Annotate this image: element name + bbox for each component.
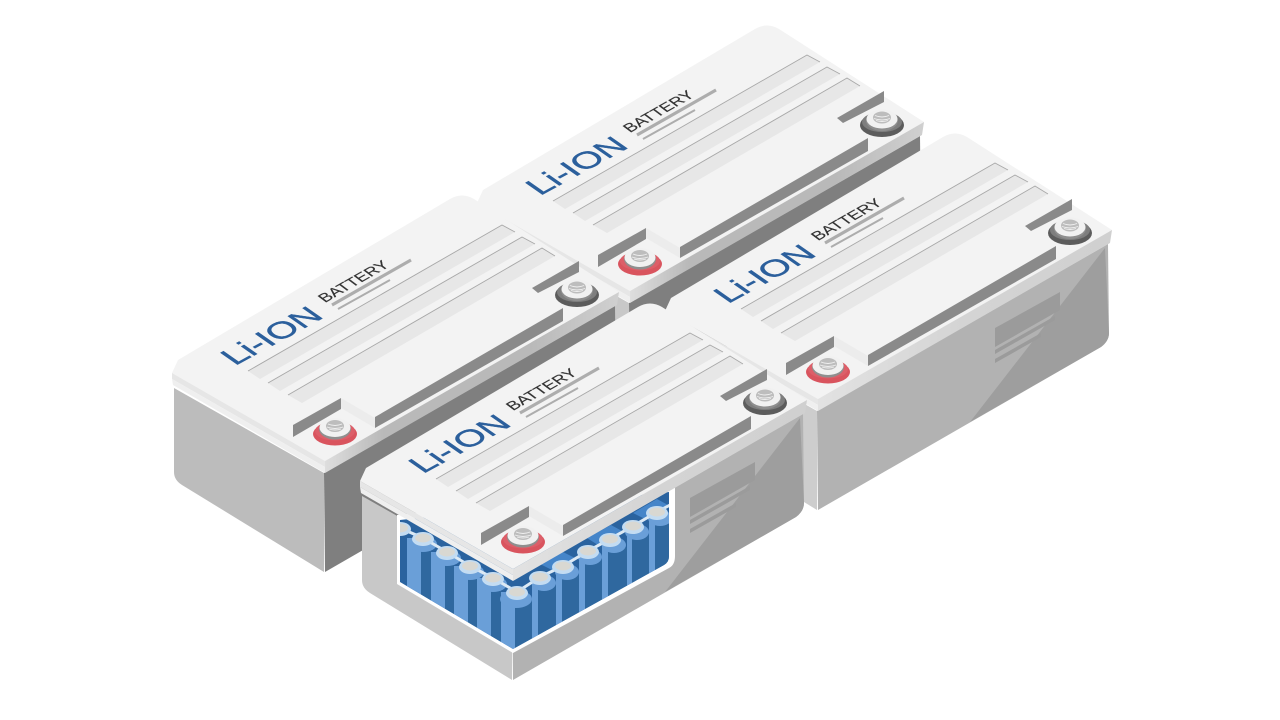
lid: left — [172, 196, 619, 473]
label: Li-ION: Li-ION — [212, 301, 330, 370]
label: BATTERY: BATTERY — [314, 258, 394, 305]
label: BATTERY: BATTERY — [619, 88, 699, 135]
label: Li-ION: Li-ION — [705, 239, 823, 308]
battery: left — [172, 196, 619, 572]
label: BATTERY: BATTERY — [807, 196, 887, 243]
label: Li-ION: Li-ION — [517, 131, 635, 200]
lid: front — [360, 304, 807, 581]
body: right — [667, 244, 1109, 510]
label: BATTERY: BATTERY — [502, 366, 582, 413]
back row highlights — [540, 499, 668, 570]
battery: back — [477, 26, 924, 402]
terminal: positive — [313, 418, 357, 446]
battery: right — [665, 134, 1112, 510]
terminal: negative — [1048, 218, 1092, 245]
cutaway window frame — [397, 488, 675, 653]
cells: right row — [532, 521, 669, 638]
label: Li-ION: Li-ION — [400, 409, 518, 478]
lid: right — [665, 134, 1112, 411]
body: front — [362, 414, 804, 680]
terminal: negative — [555, 280, 599, 307]
body: back — [479, 136, 921, 402]
terminal: positive — [618, 248, 662, 276]
cell tops — [389, 505, 672, 608]
cells: left row — [407, 538, 532, 649]
terminal: positive — [501, 526, 545, 554]
body: left — [174, 306, 616, 572]
terminal: negative — [743, 388, 787, 415]
terminal: positive — [806, 356, 850, 384]
battery cells — [400, 492, 669, 649]
lid: back — [477, 26, 924, 303]
terminal: negative — [860, 110, 904, 137]
battery: front cutaway — [360, 304, 807, 680]
